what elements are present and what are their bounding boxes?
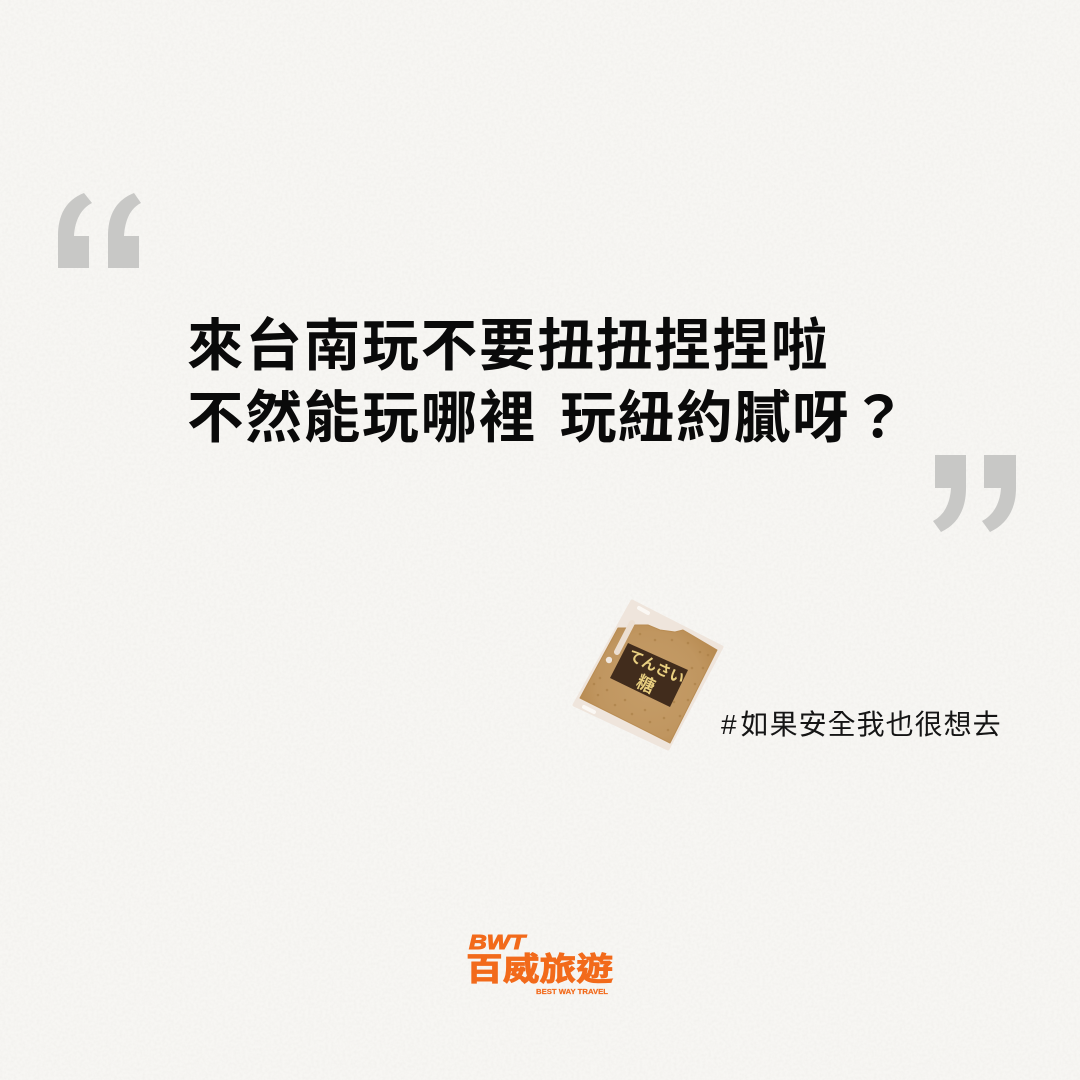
packet wrapper bbox=[574, 601, 722, 749]
icon: opening quotation mark bbox=[58, 193, 141, 268]
heading: main quote: 來台南玩不要扭扭捏捏啦 bbox=[187, 314, 829, 377]
label on packet: てんさい bbox=[625, 647, 687, 688]
heading: main quote: 不然能玩哪裡 玩紐約膩呀？ bbox=[187, 386, 908, 449]
hashtag text: #如果安全我也很想去 bbox=[721, 709, 1002, 740]
logo wordmark: BWT bbox=[469, 932, 527, 954]
packet highlights bbox=[584, 608, 648, 712]
logo chinese name: 百威旅遊 bbox=[466, 952, 613, 987]
sugar specks bbox=[593, 633, 709, 731]
illustration: brown sugar packet bbox=[572, 600, 724, 750]
sugar fill bbox=[580, 625, 717, 743]
label on packet: 糖 bbox=[633, 671, 658, 697]
logo: BWT bbox=[466, 932, 614, 996]
label on packet bbox=[610, 643, 688, 707]
icon: closing quotation mark bbox=[933, 455, 1016, 532]
heading: main quote bbox=[187, 314, 908, 449]
logo tagline: BEST WAY TRAVEL bbox=[536, 989, 609, 996]
